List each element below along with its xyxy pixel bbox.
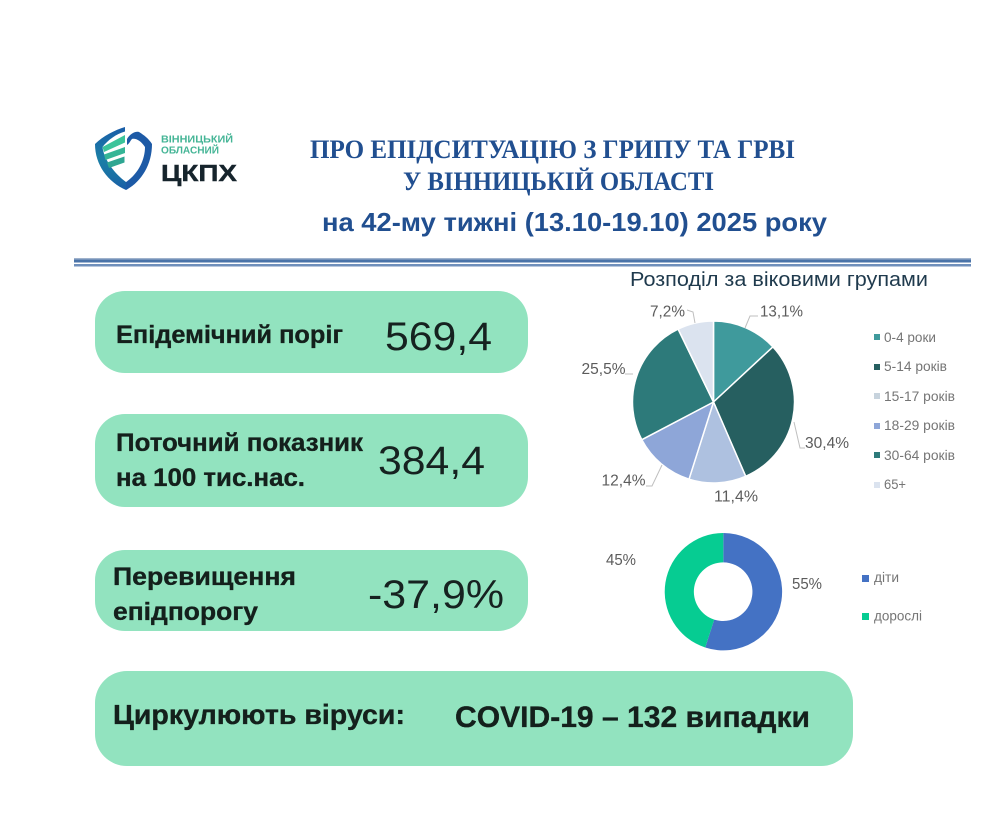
pie chart: age groups [582, 304, 849, 506]
donut chart legend [862, 570, 922, 624]
pie chart legend: 30-64 років [884, 448, 955, 463]
logo text: region: ВІННИЦЬКИЙ [161, 132, 233, 146]
icon: shield [95, 127, 152, 190]
pie chart: age groups: 13,1% [760, 304, 803, 320]
pie chart legend: 0-4 роки [884, 330, 936, 345]
panel: epidemic threshold: 569,4 [385, 315, 492, 359]
panel: current indicator: 384,4 [378, 439, 485, 483]
pie chart legend [874, 330, 955, 492]
donut chart legend: діти [874, 570, 899, 585]
panel: current indicator: Поточний показник [116, 429, 363, 457]
panel: epidemic threshold: Епідемічний поріг [116, 321, 343, 349]
pie chart: age groups: 7,2% [650, 304, 685, 320]
pie chart: age groups: 12,4% [602, 472, 646, 490]
title: У ВІННИЦЬКІЙ ОБЛАСТІ [403, 167, 714, 196]
panel: circulating viruses [95, 671, 853, 766]
title [310, 135, 828, 237]
panel: threshold excess [95, 550, 528, 631]
pie chart legend: 65+ [884, 477, 906, 492]
donut chart legend: дорослі [874, 608, 922, 624]
title: ПРО ЕПІДСИТУАЦІЮ З ГРИПУ ТА ГРВІ [310, 135, 795, 164]
panel: current indicator: на 100 тис.нас. [116, 464, 305, 492]
logo: ОБЛАСНИЙ [161, 144, 219, 156]
panel: current indicator [95, 414, 528, 507]
pie chart: age groups: 25,5% [582, 361, 626, 378]
pie chart: age groups: 11,4% [714, 488, 758, 506]
panel: epidemic threshold [95, 291, 528, 373]
panel: threshold excess: епідпорогу [113, 598, 258, 626]
panel: threshold excess: Перевищення [113, 563, 296, 591]
donut chart: children vs adults [606, 533, 822, 650]
pie chart legend: 18-29 років [884, 418, 955, 433]
pie chart legend: 15-17 років [884, 389, 955, 404]
logo text: abbreviation: ЦКПХ [161, 160, 238, 186]
panel: threshold excess: -37,9% [368, 573, 504, 617]
donut chart: children vs adults: 55% [792, 576, 822, 593]
panel: circulating viruses: Циркулюють віруси: [113, 699, 405, 730]
pie chart heading: Розподіл за віковими групами [630, 269, 928, 291]
logo [95, 127, 238, 190]
pie chart: age groups: 30,4% [805, 435, 849, 452]
pie chart legend: 5-14 років [884, 359, 947, 374]
donut chart: children vs adults: 45% [606, 552, 636, 569]
panel: circulating viruses: COVID-19 – 132 випадки [455, 701, 810, 734]
title: на 42-му тижні (13.10-19.10) 2025 року [322, 207, 828, 237]
